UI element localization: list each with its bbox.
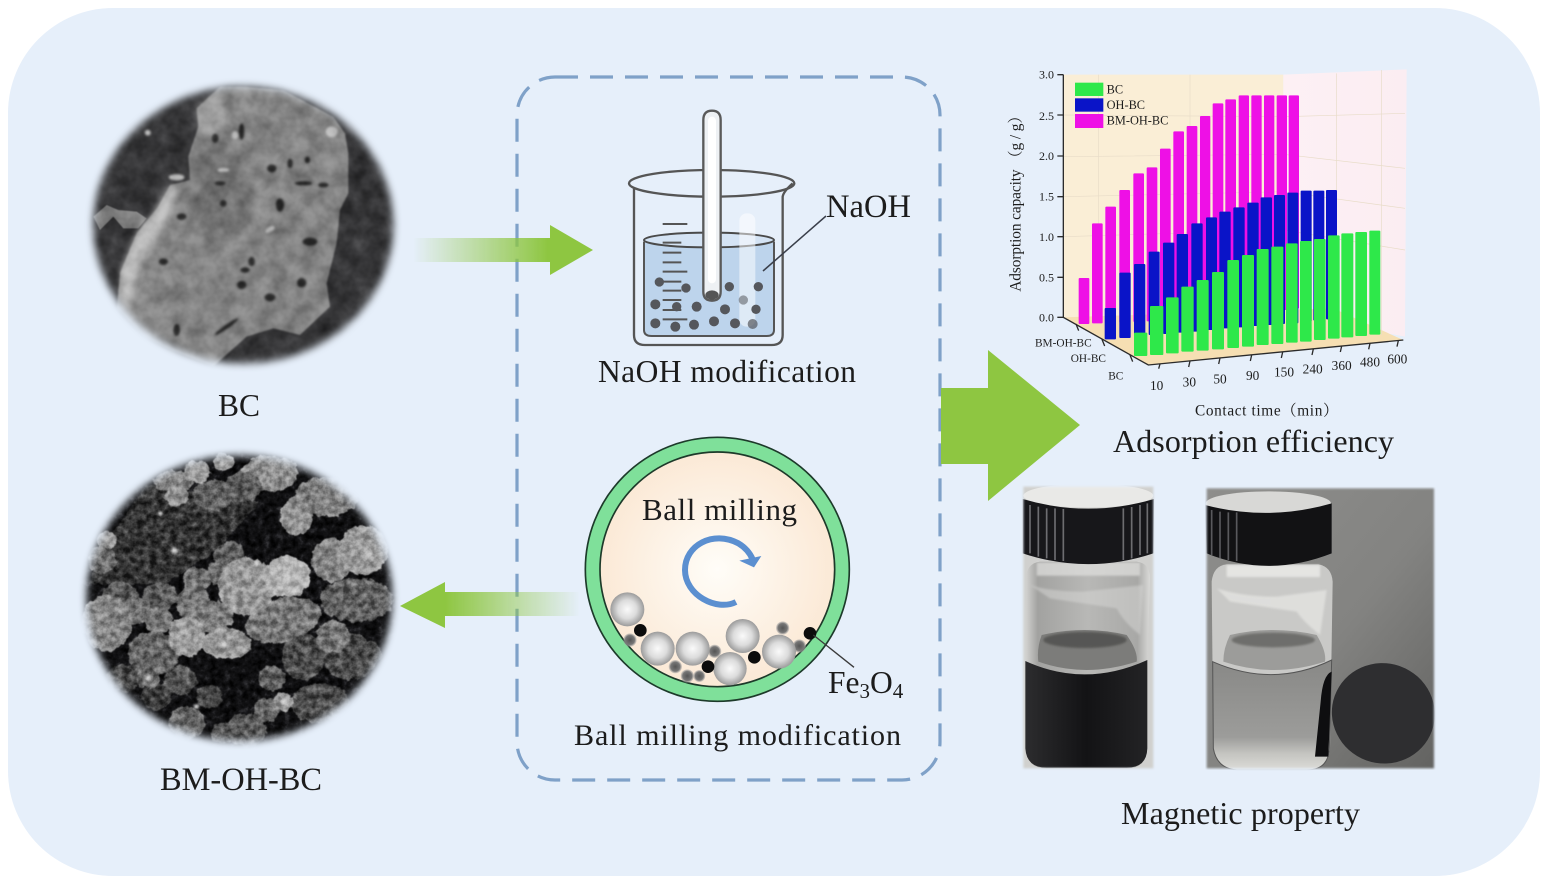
x axis labels: 480 bbox=[1360, 355, 1380, 370]
x axis labels: 50 bbox=[1213, 371, 1227, 386]
particles bbox=[650, 277, 763, 332]
arrow: ball milling to BM-OH-BC bbox=[400, 582, 580, 628]
black Fe3O4 particles bbox=[634, 624, 816, 673]
glass body bbox=[1212, 564, 1333, 770]
label: Fe3O4: 3 bbox=[860, 679, 870, 703]
glass body bbox=[1025, 562, 1150, 768]
label: NaOH: NaOH bbox=[826, 189, 911, 225]
magnet bbox=[1332, 663, 1435, 764]
bars: OH-BC bbox=[1105, 190, 1337, 339]
axes bbox=[1057, 75, 1403, 369]
icon: ball mill jar bbox=[585, 437, 854, 701]
leader line bbox=[813, 635, 854, 667]
x axis labels bbox=[1150, 351, 1408, 393]
x axis labels: 240 bbox=[1303, 361, 1323, 376]
label: Fe3O4: O bbox=[870, 665, 893, 700]
grey fine particles bbox=[623, 621, 806, 683]
y axis labels: 3.0 bbox=[1039, 68, 1054, 82]
label: Ball milling: Ball milling bbox=[642, 492, 797, 527]
x axis labels: 150 bbox=[1274, 365, 1294, 380]
label: Fe3O4: Fe bbox=[828, 665, 860, 700]
grid lines bbox=[1063, 70, 1405, 335]
y axis labels: 1.0 bbox=[1039, 230, 1054, 244]
leader line: NaOH bbox=[763, 216, 826, 271]
x axis labels: 30 bbox=[1183, 375, 1196, 390]
x axis title: Contact time（min） bbox=[1195, 402, 1338, 419]
x axis labels: 10 bbox=[1150, 378, 1164, 393]
SEM image: BC bbox=[87, 80, 400, 370]
y axis labels: 2.0 bbox=[1039, 149, 1054, 163]
label: Magnetic property: Magnetic property bbox=[1121, 795, 1360, 831]
label: Adsorption efficiency: Adsorption efficiency bbox=[1113, 423, 1394, 459]
legend: BC bbox=[1107, 82, 1123, 96]
x axis labels: 90 bbox=[1246, 368, 1260, 383]
y axis labels: 1.5 bbox=[1039, 190, 1054, 204]
liquid bbox=[644, 232, 774, 336]
photo: vial with suspension bbox=[1020, 484, 1157, 772]
category labels bbox=[1035, 338, 1123, 382]
label: BC: BC bbox=[218, 388, 260, 423]
panel: modification steps dashed box bbox=[517, 77, 940, 780]
label: BM-OH-BC: BM-OH-BC bbox=[160, 762, 322, 798]
bars: BC bbox=[1134, 231, 1380, 356]
milling balls bbox=[610, 592, 796, 685]
jar wall bbox=[585, 437, 849, 701]
cap bbox=[1206, 491, 1331, 515]
graduation marks bbox=[663, 224, 687, 319]
category labels: BC bbox=[1108, 370, 1123, 382]
legend: BM-OH-BC bbox=[1107, 113, 1168, 127]
SEM image: BM-OH-BC bbox=[80, 449, 398, 748]
y axis labels: 2.5 bbox=[1039, 109, 1054, 123]
x axis labels: 600 bbox=[1387, 351, 1408, 366]
y axis labels: 0.0 bbox=[1039, 311, 1054, 325]
arrow: BC to NaOH modification bbox=[413, 225, 593, 275]
bar chart: adsorption capacity bbox=[1008, 68, 1408, 419]
cap bbox=[1024, 486, 1154, 508]
category labels: BM-OH-BC bbox=[1035, 338, 1092, 350]
photo: vial separated by magnet bbox=[1205, 487, 1449, 778]
back walls bbox=[1063, 75, 1283, 317]
arrow: large result arrow bbox=[941, 350, 1080, 501]
bars: BM-OH-BC bbox=[1079, 95, 1299, 324]
label: NaOH modification: NaOH modification bbox=[598, 354, 856, 389]
y axis labels: 0.5 bbox=[1039, 271, 1054, 285]
icon: beaker with NaOH bbox=[629, 111, 794, 345]
stirring rod bbox=[703, 111, 721, 301]
label: Ball milling modification: Ball milling modification bbox=[574, 718, 901, 752]
label: Fe3O4: 4 bbox=[893, 679, 904, 703]
beaker body bbox=[634, 183, 793, 345]
x axis labels: 360 bbox=[1332, 358, 1352, 373]
legend bbox=[1075, 82, 1168, 128]
rotation arrow bbox=[685, 538, 753, 605]
floor bbox=[1063, 308, 1403, 365]
category labels: OH-BC bbox=[1071, 353, 1106, 365]
y axis labels bbox=[1039, 68, 1054, 325]
highlight bbox=[739, 213, 755, 327]
y axis title: Adsorption capacity （g / g） bbox=[1008, 108, 1025, 292]
legend: OH-BC bbox=[1107, 98, 1145, 112]
